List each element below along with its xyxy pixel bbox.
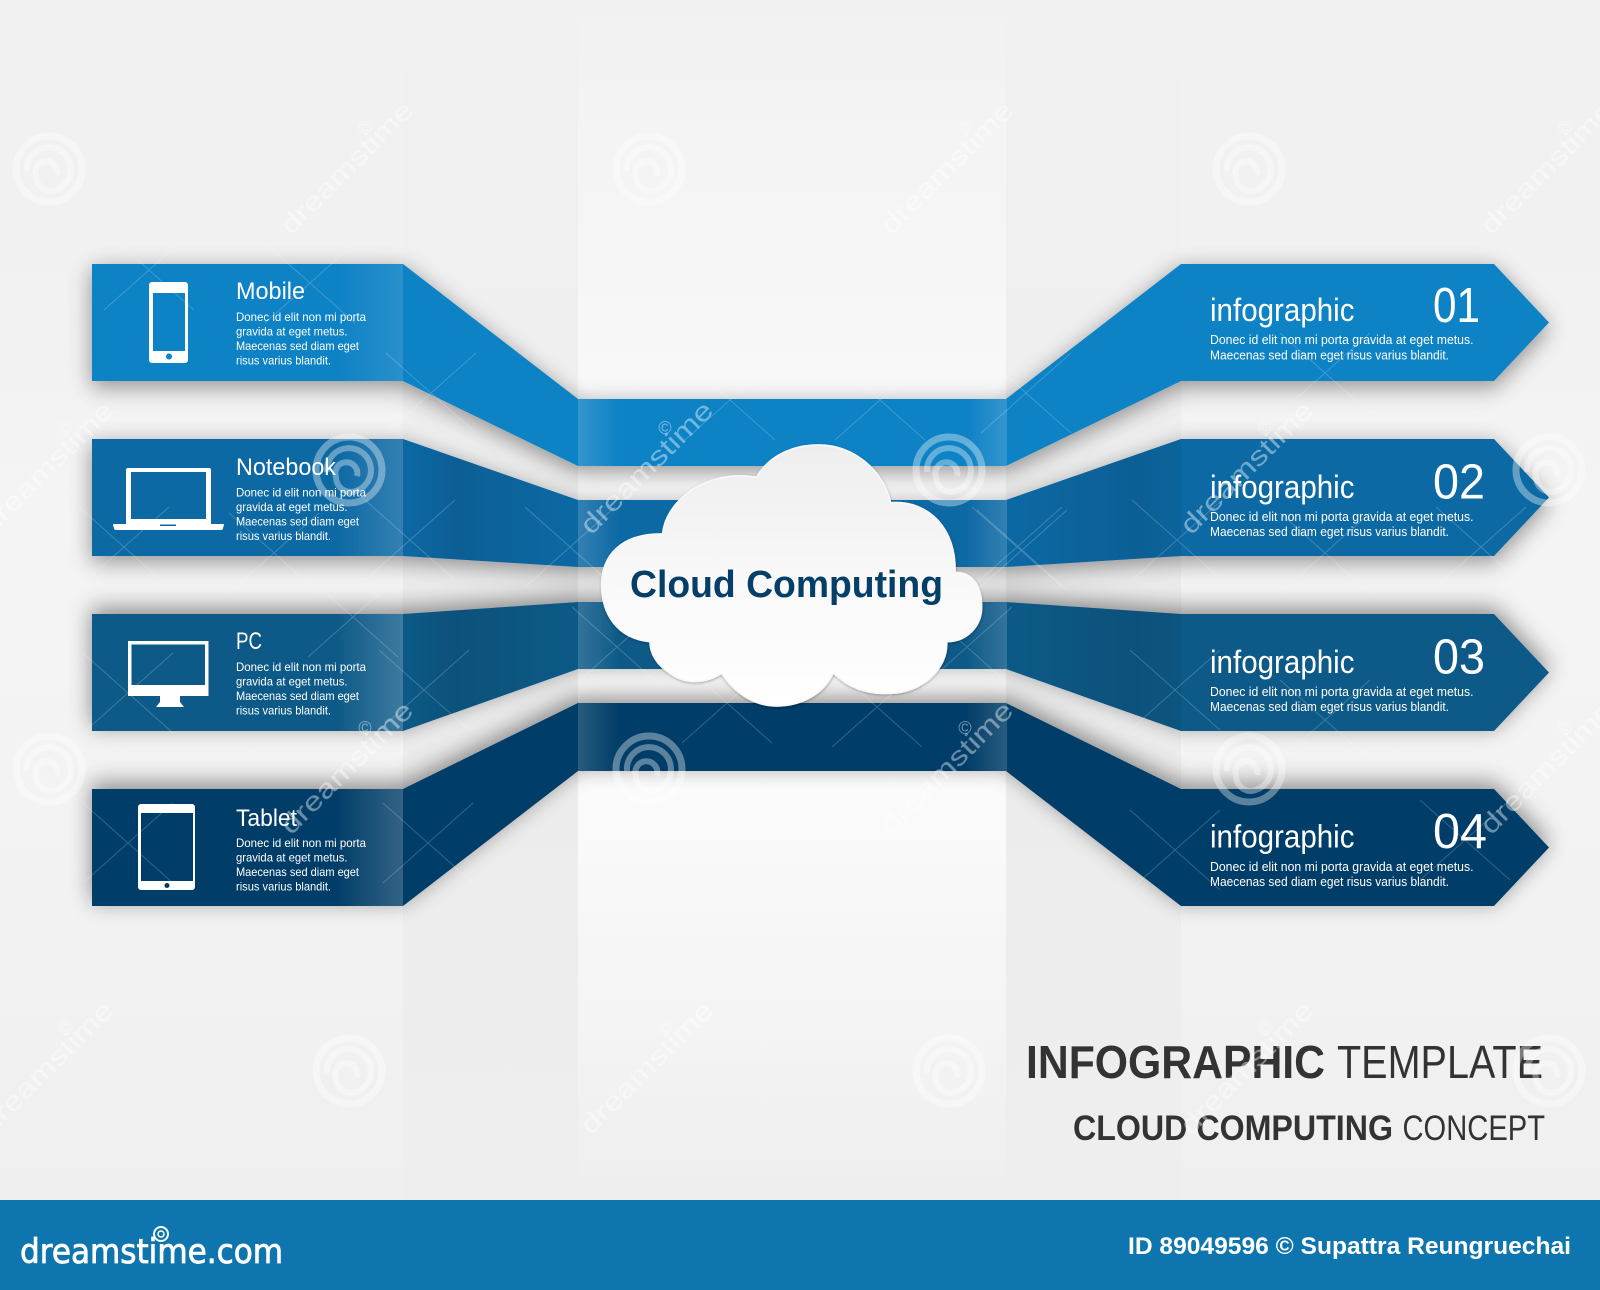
icon: tablet (138, 804, 195, 890)
text block: notebook description: Maecenas sed diam eget (236, 514, 360, 528)
watermark: © (58, 418, 72, 438)
text block: item 01 (1210, 332, 1474, 362)
panel: infographic 03 (1210, 630, 1485, 714)
text block: item 04 (1210, 859, 1474, 889)
watermark: © (1558, 718, 1572, 738)
text block: pc description (236, 660, 366, 717)
watermark: dreamstime (574, 995, 719, 1140)
icon: desktop monitor (128, 641, 208, 707)
watermark: © (958, 718, 972, 738)
heading: infographic: infographic (1210, 469, 1354, 505)
title: infographic template: INFOGRAPHIC (1026, 1036, 1325, 1088)
text block: tablet description: Maecenas sed diam eget (236, 865, 360, 879)
footer bar (0, 1200, 1600, 1290)
text block: mobile description (236, 310, 366, 367)
heading: infographic: infographic (1210, 818, 1354, 854)
panel: infographic 02 (1210, 456, 1485, 539)
heading: Tablet: Tablet (236, 805, 297, 832)
watermark: © (658, 1018, 672, 1038)
footer credit: ID 89049596 © Supattra Reungruechai (1128, 1233, 1571, 1260)
watermark: dreamstime (1174, 995, 1319, 1140)
panel: infographic 04 (1210, 805, 1487, 889)
text block: pc description: Donec id elit non mi porta (236, 660, 366, 674)
heading: Mobile: Mobile (236, 278, 305, 305)
footer logo: dreamstime.com (20, 1232, 283, 1272)
watermark: © (358, 718, 372, 738)
cloud label: Cloud Computing (630, 564, 943, 606)
text block: item 02 (1210, 509, 1474, 539)
subtitle: cloud computing concept: CLOUD COMPUTING (1073, 1109, 1393, 1148)
watermark: dreamstime (574, 395, 719, 540)
number 01: 01 (1433, 279, 1480, 333)
number 04: 04 (1433, 805, 1487, 859)
text block: item 02: Maecenas sed diam eget risus varius blandit. (1210, 524, 1449, 539)
text block: pc description: gravida at eget metus. (236, 674, 348, 688)
text block: item 03: Donec id elit non mi porta gravida at eget metus. (1210, 684, 1474, 699)
watermark: dreamstime (1474, 695, 1600, 840)
icon: laptop (113, 468, 224, 530)
text block: pc description: Maecenas sed diam eget (236, 689, 360, 703)
icon: smartphone (149, 282, 188, 363)
heading: PC: PC (236, 628, 262, 655)
heading: infographic: infographic (1210, 292, 1354, 328)
text block: notebook description: gravida at eget metus. (236, 500, 348, 514)
watermark: © (1558, 118, 1572, 138)
text block: notebook description: risus varius blandit. (236, 529, 331, 543)
text block: item 03 (1210, 684, 1474, 714)
watermark: dreamstime (874, 695, 1019, 840)
watermark: dreamstime (874, 95, 1019, 240)
panel: notebook (113, 454, 366, 543)
text block: mobile description: Maecenas sed diam eget (236, 339, 360, 353)
title: infographic template: TEMPLATE (1337, 1036, 1543, 1088)
text block: notebook description: Donec id elit non mi porta (236, 486, 366, 500)
watermark: © (658, 418, 672, 438)
text block: mobile description: risus varius blandit. (236, 353, 331, 367)
text block: tablet description: Donec id elit non mi porta (236, 836, 366, 850)
text block: tablet description: gravida at eget metus. (236, 850, 348, 864)
subtitle: cloud computing concept: CONCEPT (1402, 1109, 1545, 1148)
text block: item 04: Donec id elit non mi porta gravida at eget metus. (1210, 859, 1474, 874)
text block: mobile description: gravida at eget metus. (236, 324, 348, 338)
text block: item 01: Donec id elit non mi porta gravida at eget metus. (1210, 332, 1474, 347)
watermark: © (1258, 418, 1272, 438)
number 03: 03 (1433, 630, 1485, 684)
text block: notebook description (236, 486, 366, 543)
title: infographic template (1026, 1036, 1543, 1088)
watermark: dreamstime (1174, 395, 1319, 540)
watermark: dreamstime (274, 695, 419, 840)
text block: item 03: Maecenas sed diam eget risus varius blandit. (1210, 699, 1449, 714)
number 02: 02 (1433, 456, 1485, 510)
heading: Notebook: Notebook (236, 454, 337, 481)
watermark: © (1258, 1018, 1272, 1038)
text block: item 01: Maecenas sed diam eget risus varius blandit. (1210, 347, 1449, 362)
watermark: dreamstime (274, 95, 419, 240)
heading: infographic: infographic (1210, 644, 1354, 680)
watermark: dreamstime (1474, 95, 1600, 240)
text block: tablet description: risus varius blandit. (236, 880, 331, 894)
cloud shape (602, 445, 982, 706)
panel: tablet (138, 804, 366, 894)
text block: mobile description: Donec id elit non mi porta (236, 310, 366, 324)
text block: item 04: Maecenas sed diam eget risus varius blandit. (1210, 874, 1449, 889)
text block: item 02: Donec id elit non mi porta gravida at eget metus. (1210, 509, 1474, 524)
panel: mobile (149, 278, 366, 367)
text block: pc description: risus varius blandit. (236, 703, 331, 717)
watermark: © (958, 118, 972, 138)
cloud (602, 445, 982, 706)
text block: tablet description (236, 836, 366, 894)
panel: pc (128, 628, 366, 717)
watermark: © (58, 1018, 72, 1038)
ribbons (92, 264, 1549, 906)
panel: infographic 01 (1210, 279, 1480, 362)
watermark: © (358, 118, 372, 138)
